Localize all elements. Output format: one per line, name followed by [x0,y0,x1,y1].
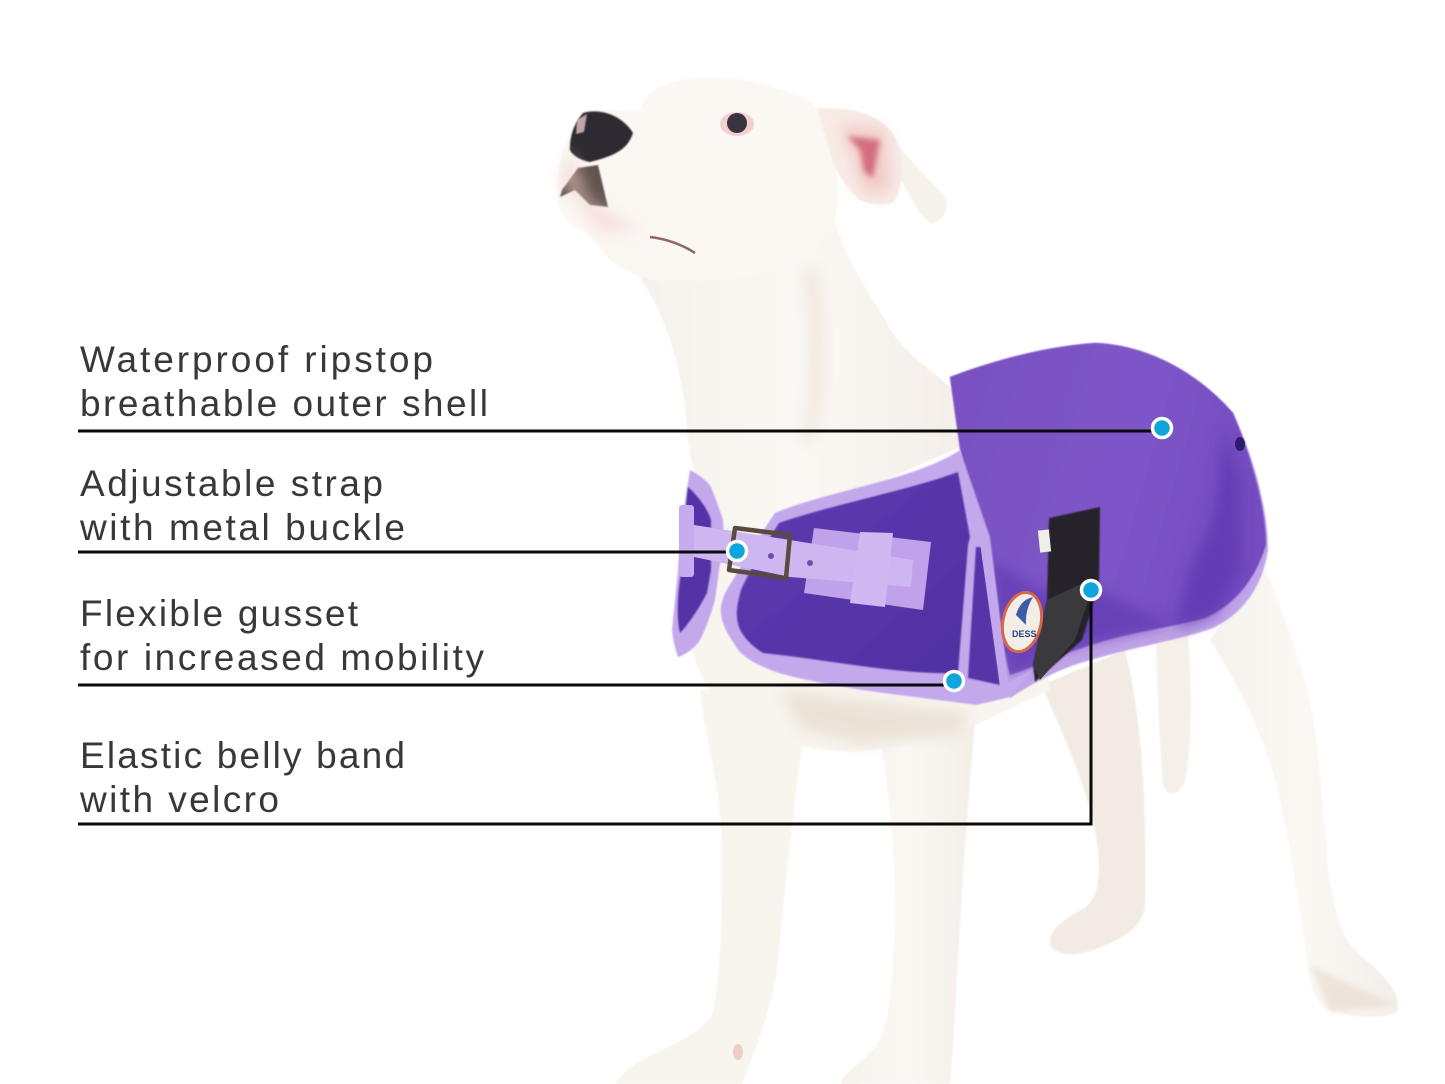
label: strap: Adjustable strap [80,463,383,504]
lower shell shadow [990,560,1170,675]
leader line: outer shell [78,430,1162,432]
shell hole [1235,437,1245,451]
second gusset trim [980,543,1008,685]
near front leg back [615,690,803,1084]
paw shading [1310,965,1395,1012]
marker: belly band [1082,580,1100,600]
label: belly band: with velcro [79,779,279,820]
label: outer shell [80,339,488,424]
nose [570,111,633,162]
coat: front panel [721,450,1035,705]
mouth [650,237,695,253]
label: gusset: for increased mobility [80,637,484,678]
muzzle spots [560,165,608,207]
eye [720,112,754,136]
illustration: dog wearing purple coat [557,78,1398,1084]
logo badge [997,589,1047,655]
label: belly band: Elastic belly band [80,735,405,776]
far hind leg [1042,650,1145,954]
tail [1156,635,1191,794]
label: strap: with metal buckle [79,507,405,548]
neck fur shading [800,265,826,445]
chest and body [690,460,1050,751]
marker: buckle [728,542,746,560]
label: gusset: Flexible gusset [80,593,359,634]
ear flap tip [885,130,947,223]
label: belly band [79,735,405,820]
neck [640,190,965,530]
ear pink [840,125,892,195]
label: strap [79,463,405,548]
shell fold shadow [1175,425,1240,630]
strap patch and keeper [694,525,931,610]
label: outer shell: Waterproof ripstop [80,339,433,380]
nose highlight [576,114,587,134]
leader line: belly band [78,590,1091,824]
head [557,78,838,281]
leader line: gusset [78,684,954,686]
marker: outer shell [1152,418,1172,438]
toe pink [733,1044,743,1060]
elastic belly band with velcro [1033,507,1100,682]
marker: gusset [944,672,964,690]
near hind leg [1210,565,1398,1017]
coat: outer shell [950,343,1268,698]
label: gusset [80,593,484,678]
coat: left flap [672,470,723,657]
leader line: strap [78,550,737,554]
ear [817,108,902,204]
ear inner red [847,136,880,178]
gusset [968,547,1000,685]
label: outer shell: breathable outer shell [80,383,488,424]
metal buckle [729,528,790,578]
chest shadow under coat [780,690,970,745]
muzzle blush [560,150,640,232]
near front leg [840,690,975,1084]
logo badge: DESS [1012,629,1037,639]
